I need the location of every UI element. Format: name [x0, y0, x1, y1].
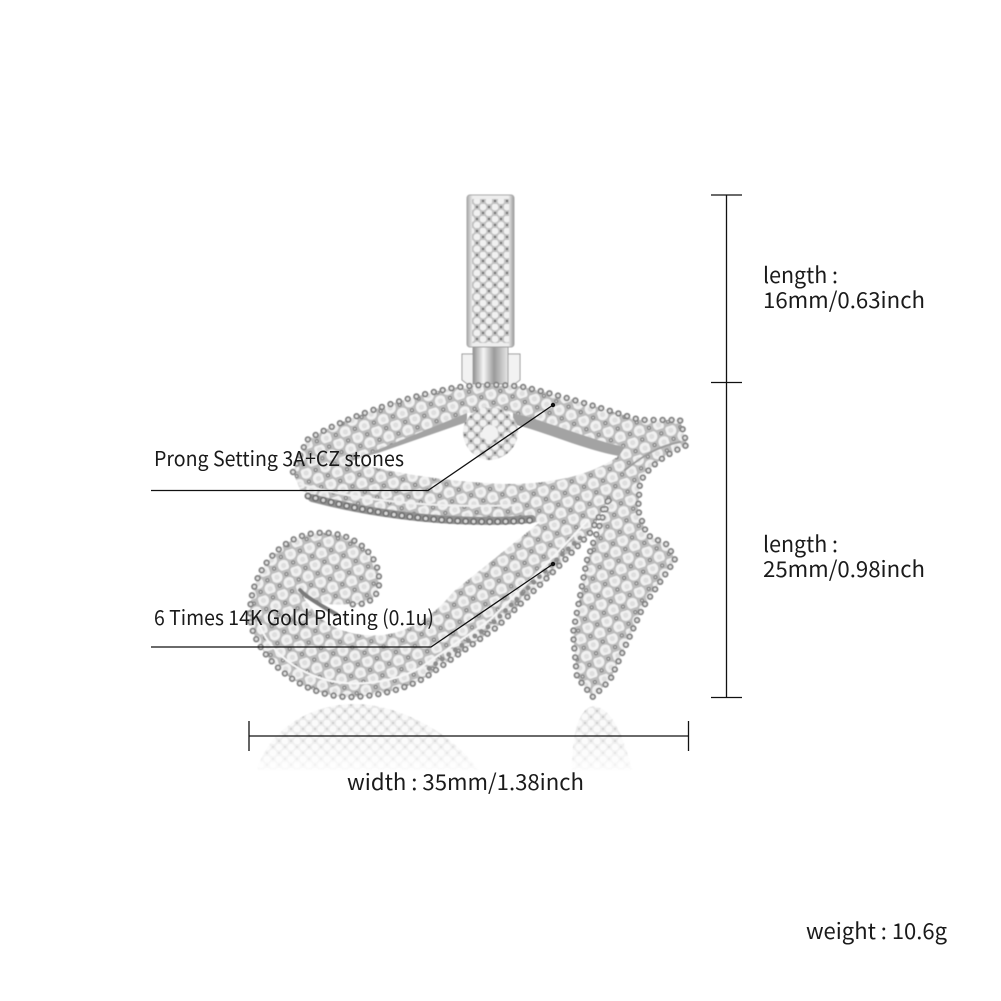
- tail shaded rim: [258, 442, 680, 683]
- label: eye length: 25mm/0.98inch: [763, 552, 925, 584]
- pendant: [250, 195, 687, 697]
- eye and tail body: [250, 385, 687, 697]
- lower eyelid underside beads: [300, 484, 535, 522]
- spiral notch: [300, 590, 336, 614]
- callout: gold plating: [151, 562, 555, 647]
- beaded edges: [250, 385, 687, 697]
- callout label: 6 Times 14K Gold Plating (0.1u): [154, 601, 434, 631]
- infographic canvas: [151, 194, 947, 944]
- reflection of pendant: [257, 704, 632, 770]
- pupil cluster: [463, 407, 518, 460]
- connector: [462, 347, 520, 386]
- label: bail length: length :: [763, 258, 838, 290]
- callout label: Prong Setting 3A+CZ stones: [154, 442, 404, 472]
- inner eyelid strips: [355, 413, 625, 459]
- dimension: horizontal bracket: [249, 721, 688, 751]
- label: eye length: length :: [763, 527, 838, 559]
- label: width: width : 35mm/1.38inch: [347, 765, 584, 797]
- dimension: vertical bracket: [711, 195, 742, 698]
- bail: [467, 195, 514, 347]
- callout: prong setting: [151, 403, 555, 490]
- label: bail length: 16mm/0.63inch: [763, 283, 925, 315]
- label: weight: weight : 10.6g: [806, 914, 948, 946]
